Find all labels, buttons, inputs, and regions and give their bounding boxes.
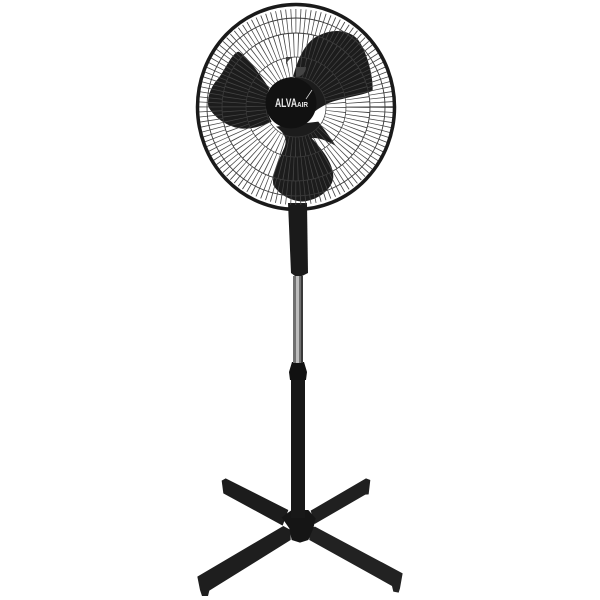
upper right blade — [293, 31, 373, 113]
back left leg — [222, 478, 288, 526]
left blade — [208, 52, 272, 129]
fan base: cross-shaped feet — [197, 478, 403, 596]
centre hub — [266, 78, 316, 128]
lower pole — [291, 378, 305, 518]
brand logo — [275, 90, 312, 110]
outer rim — [198, 4, 394, 210]
fan head — [198, 4, 394, 210]
height-adjust collar — [289, 362, 307, 380]
blades — [208, 31, 373, 201]
base hub — [282, 510, 316, 543]
bottom blade — [273, 122, 336, 201]
chrome upper pole — [293, 276, 303, 363]
back right leg — [311, 478, 370, 524]
front right leg — [309, 527, 403, 593]
front guard rings — [207, 18, 385, 196]
motor neck — [288, 203, 308, 276]
front left leg — [197, 526, 291, 596]
brand logo: ALVA — [275, 96, 297, 110]
brand logo: AIR — [297, 102, 308, 109]
guard spokes — [210, 21, 382, 193]
